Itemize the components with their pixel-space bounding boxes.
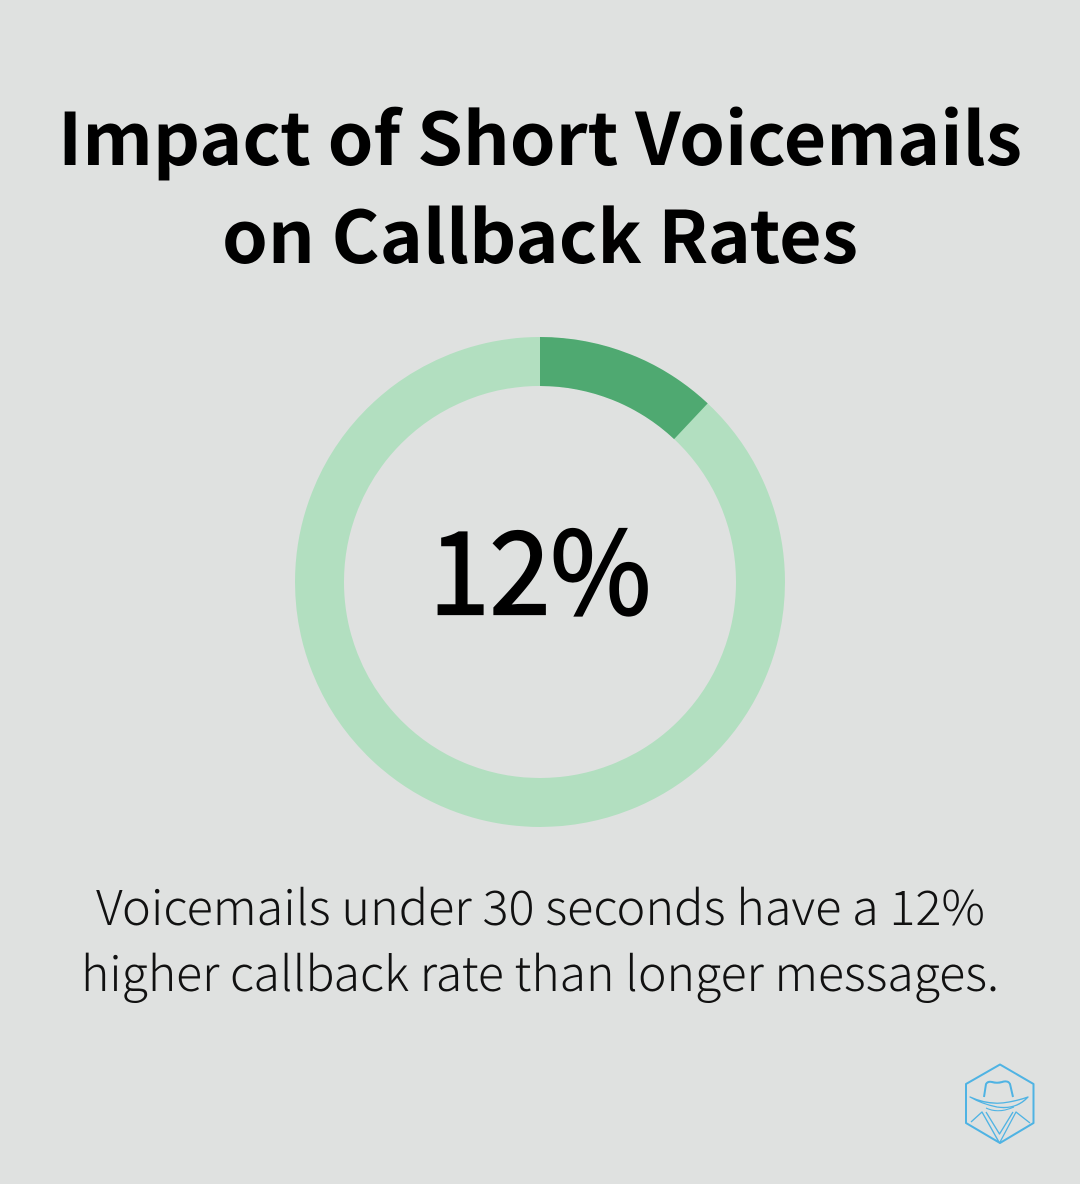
center value: 12% (429, 482, 651, 647)
icon: logo hexagon with hat figure (966, 1064, 1034, 1143)
donut chart (320, 337, 760, 802)
donut segment: 12% (540, 337, 708, 439)
description text: higher callback rate than longer messages. (81, 935, 999, 1005)
title: Impact of Short Voicemails (58, 81, 1022, 186)
donut track (320, 362, 760, 802)
title: on Callback Rates (222, 179, 858, 284)
title (58, 81, 1022, 284)
description text: Voicemails under 30 seconds have a 12% (96, 869, 985, 939)
description text (81, 869, 999, 1005)
